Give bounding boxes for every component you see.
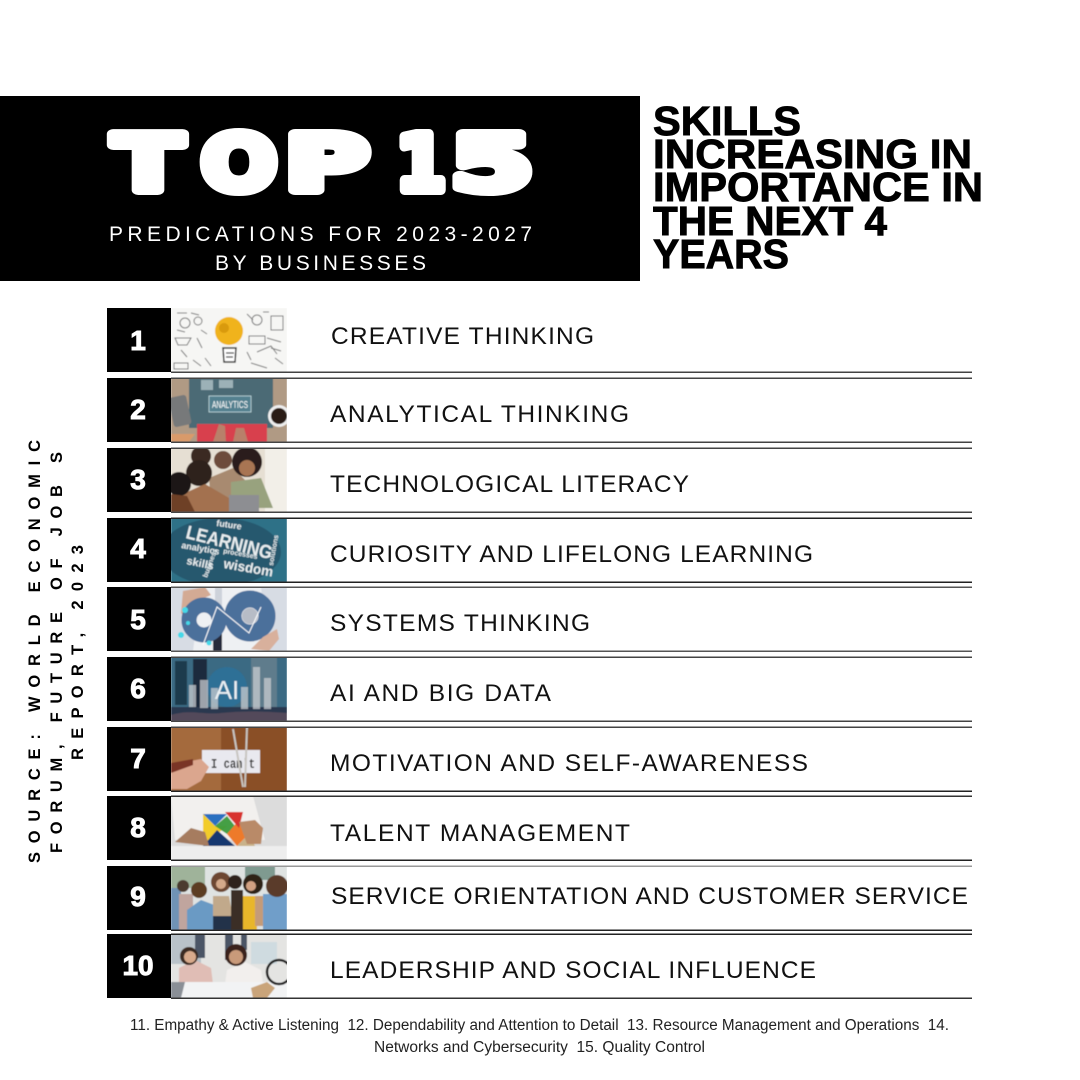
row 6: AI and big data <box>107 656 972 722</box>
image: group of women talking <box>171 867 287 930</box>
label: TALENT MANAGEMENT <box>330 820 630 847</box>
footer: remaining skills 11-15 <box>130 1017 949 1056</box>
row 6: AI and big data: 6 <box>130 673 146 704</box>
image: coloured tangram with hands <box>171 797 287 860</box>
row 7: motivation and self-awareness: 7 <box>130 743 146 774</box>
title: TOP 15: T <box>113 120 184 209</box>
heading: skills increasing: INCREASING IN <box>653 131 972 177</box>
row 3: technological literacy: 3 <box>130 464 146 495</box>
heading: skills increasing <box>653 98 983 277</box>
row 7: motivation and self-awareness <box>107 726 972 792</box>
image: two women at desk <box>171 935 287 998</box>
row 8: talent management: 8 <box>130 812 146 843</box>
title: TOP 15: O <box>201 120 277 209</box>
label: ANALYTICAL THINKING <box>330 401 629 428</box>
row 2: analytical thinking <box>107 378 972 443</box>
row 1: creative thinking: 1 <box>130 325 146 356</box>
label: TECHNOLOGICAL LITERACY <box>330 471 689 498</box>
row 8: talent management <box>107 796 972 861</box>
row 1: creative thinking <box>107 308 972 373</box>
image: learning word cloud <box>171 518 287 582</box>
image: AI city <box>171 658 287 720</box>
label: AI AND BIG DATA <box>330 680 552 707</box>
image: infinity gears <box>171 588 287 650</box>
subtitle: PREDICATIONS FOR 2023-2027 <box>109 223 532 246</box>
heading: skills increasing: YEARS <box>653 231 789 277</box>
image: AI city: AI <box>215 675 239 705</box>
label: SERVICE ORIENTATION AND CUSTOMER SERVICE <box>331 883 968 910</box>
image: learning word cloud: wisdom <box>222 555 274 580</box>
image: learning word cloud: future <box>216 518 242 532</box>
footer: remaining skills 11-15: 11. Empathy & Active Listening 12. Dependability and Attention to Detail 13. Resource Management and Operations 14. <box>130 1017 949 1034</box>
title: TOP 15 <box>113 120 533 209</box>
source note (vertical): SOURCE: WORLD ECONOMIC <box>26 440 44 863</box>
image: learning word cloud: skills <box>185 555 215 573</box>
image: group at laptop <box>171 449 287 512</box>
row 5: systems thinking <box>107 586 972 652</box>
footer: remaining skills 11-15: Networks and Cybersecurity 15. Quality Control <box>374 1039 705 1056</box>
subtitle: BY BUSINESSES <box>215 252 426 275</box>
image: learning word cloud: solutions <box>268 534 280 566</box>
label: LEADERSHIP AND SOCIAL INFLUENCE <box>330 957 816 984</box>
title: TOP 15: 5 <box>451 120 533 209</box>
image: learning word cloud: LEARNING <box>184 522 274 564</box>
heading: skills increasing: THE NEXT 4 <box>653 198 887 244</box>
image: I can't card cut <box>171 728 287 790</box>
source note (vertical): REPORT, 2023 <box>69 545 87 760</box>
image: I can't card cut: I can't <box>211 757 255 773</box>
header banner <box>0 96 640 281</box>
heading: skills increasing: SKILLS <box>653 98 801 144</box>
row 9: service orientation: 9 <box>130 881 146 912</box>
heading: skills increasing: IMPORTANCE IN <box>653 164 983 210</box>
image: light bulb sketch <box>172 308 286 372</box>
source note (vertical) <box>26 440 87 863</box>
row 2: analytical thinking: 2 <box>130 394 146 425</box>
label: SYSTEMS THINKING <box>330 610 590 637</box>
label: MOTIVATION AND SELF-AWARENESS <box>330 750 808 777</box>
row 4: curiosity and lifelong learning <box>107 518 972 586</box>
row 10: leadership and social influence <box>107 934 972 999</box>
image: analytics dashboard <box>171 379 287 442</box>
title: TOP 15: 1 <box>396 120 446 209</box>
label: CREATIVE THINKING <box>331 323 594 350</box>
title: TOP 15: P <box>285 120 369 209</box>
row 3: technological literacy <box>107 446 972 513</box>
row 10: leadership and social influence: 10 <box>122 950 154 981</box>
subtitle <box>109 223 532 275</box>
image: learning word cloud: analytics <box>181 540 220 557</box>
row 4: curiosity and lifelong learning: 4 <box>130 533 146 564</box>
source note (vertical): FORUM, FUTURE OF JOB S <box>48 452 66 853</box>
row 9: service orientation <box>107 866 972 931</box>
label: CURIOSITY AND LIFELONG LEARNING <box>330 541 813 568</box>
row 5: systems thinking: 5 <box>130 604 146 635</box>
image: learning word cloud: processes <box>223 548 258 561</box>
image: learning word cloud: business <box>202 548 219 579</box>
image: analytics dashboard: ANALYTICS <box>212 400 248 411</box>
